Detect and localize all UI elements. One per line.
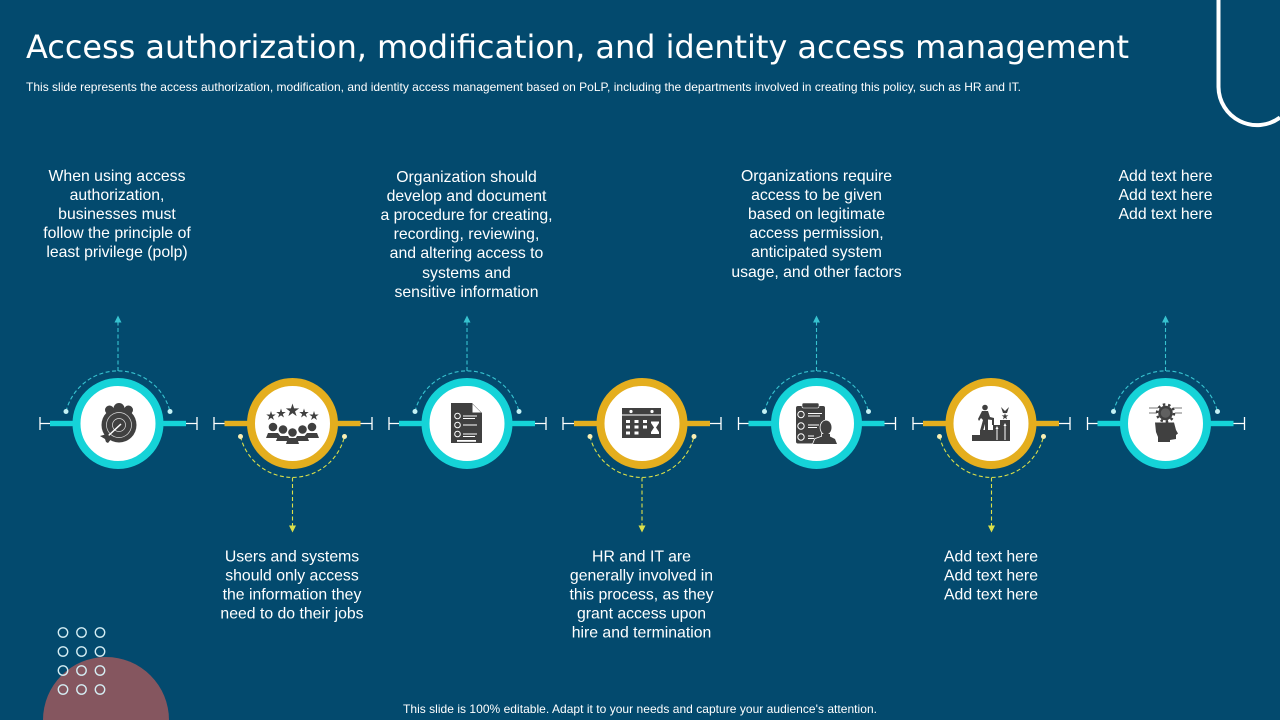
text: step 2 description: need to do their jobs [220,606,364,622]
connector: step 6 down arrow [937,434,1046,532]
connector: step 1 up arrow [64,316,172,414]
text: step 5 description: Organizations require [741,168,892,185]
node: step 7 ring [1088,382,1244,465]
text: step 1 description: follow the principle of [43,225,191,242]
connector: step 4 down arrow [588,434,696,532]
text: step 3 description: Organization should [396,169,537,186]
text: step 4 description: hire and termination [572,624,711,642]
decoration: bottom left circle [43,657,169,720]
icon: head with gear [1149,404,1182,442]
node: step 1 ring [40,382,197,465]
title: Access authorization, modification, and identity access management [26,28,1129,66]
text: step 3 description: sensitive information [394,284,538,301]
text: step 4 description: generally involved in [570,568,713,584]
text: step 3 description: systems and [422,265,511,282]
text: step 3 description: a procedure for creating, [380,207,553,224]
text: step 6 description: Add text here [944,586,1038,604]
connector: step 7 up arrow [1111,316,1220,414]
icon: calendar [622,408,661,438]
step 3: procedure [380,169,553,465]
text: step 4 description: this process, as they [570,586,714,604]
text: step 3 description: recording, reviewing, [394,226,539,243]
text: step 5 description: access to be given [751,187,882,204]
text: step 2 description: the information they [223,586,361,604]
step 6: placeholder lower [913,382,1070,604]
connector: step 3 up arrow [412,316,522,414]
subtitle: This slide represents the access authorization, modification, and identity access management based on PoLP, including the departments involved in creating this policy, such as HR and IT. [26,80,1021,94]
decoration: dot grid [58,628,105,694]
text: step 1 description: When using access [49,168,186,185]
step 2: users and systems [214,382,372,622]
node: step 4 ring [563,382,721,465]
step 5: legitimate access [731,168,902,465]
text: step 6 description: Add text here [944,548,1038,566]
text: step 1 description: authorization, [70,187,164,204]
decoration: top right U shape [1218,0,1280,125]
icon: document checklist [451,403,482,443]
text: step 7 description: Add text here [1119,168,1213,185]
text: step 7 description: Add text here [1119,187,1213,204]
text: step 2 description: should only access [225,568,359,584]
node: step 5 ring [738,382,896,465]
text: step 3 description: develop and document [387,188,547,205]
text: step 1 description: least privilege (polp) [46,244,188,261]
step 7: placeholder upper [1088,168,1244,465]
icon: target with people [100,403,136,443]
node: step 2 ring [214,382,372,465]
text: step 1 description: businesses must [58,206,176,223]
step 1: access authorization principle [40,168,197,465]
node: step 3 ring [389,382,546,465]
footer note: This slide is 100% editable. Adapt it to your needs and capture your audience's attention. [403,702,877,716]
connector: step 2 down arrow [238,434,347,532]
text: step 5 description: access permission, [749,225,884,242]
text: step 7 description: Add text here [1119,206,1213,223]
text: step 5 description: usage, and other factors [731,264,902,281]
text: step 3 description: and altering access to [390,245,544,262]
icon: person climbing stairs [972,405,1010,441]
node: step 6 ring [913,382,1070,465]
connector: step 5 up arrow [762,316,871,414]
text: step 5 description: based on legitimate [748,206,885,223]
text: step 4 description: HR and IT are [592,548,691,566]
text: step 2 description: Users and systems [225,548,359,566]
step 4: HR and IT [563,382,721,642]
icon: clipboard and person [796,403,837,444]
text: step 6 description: Add text here [944,568,1038,584]
text: step 4 description: grant access upon [577,606,706,622]
icon: stars and team [266,404,319,444]
text: step 5 description: anticipated system [751,244,882,261]
